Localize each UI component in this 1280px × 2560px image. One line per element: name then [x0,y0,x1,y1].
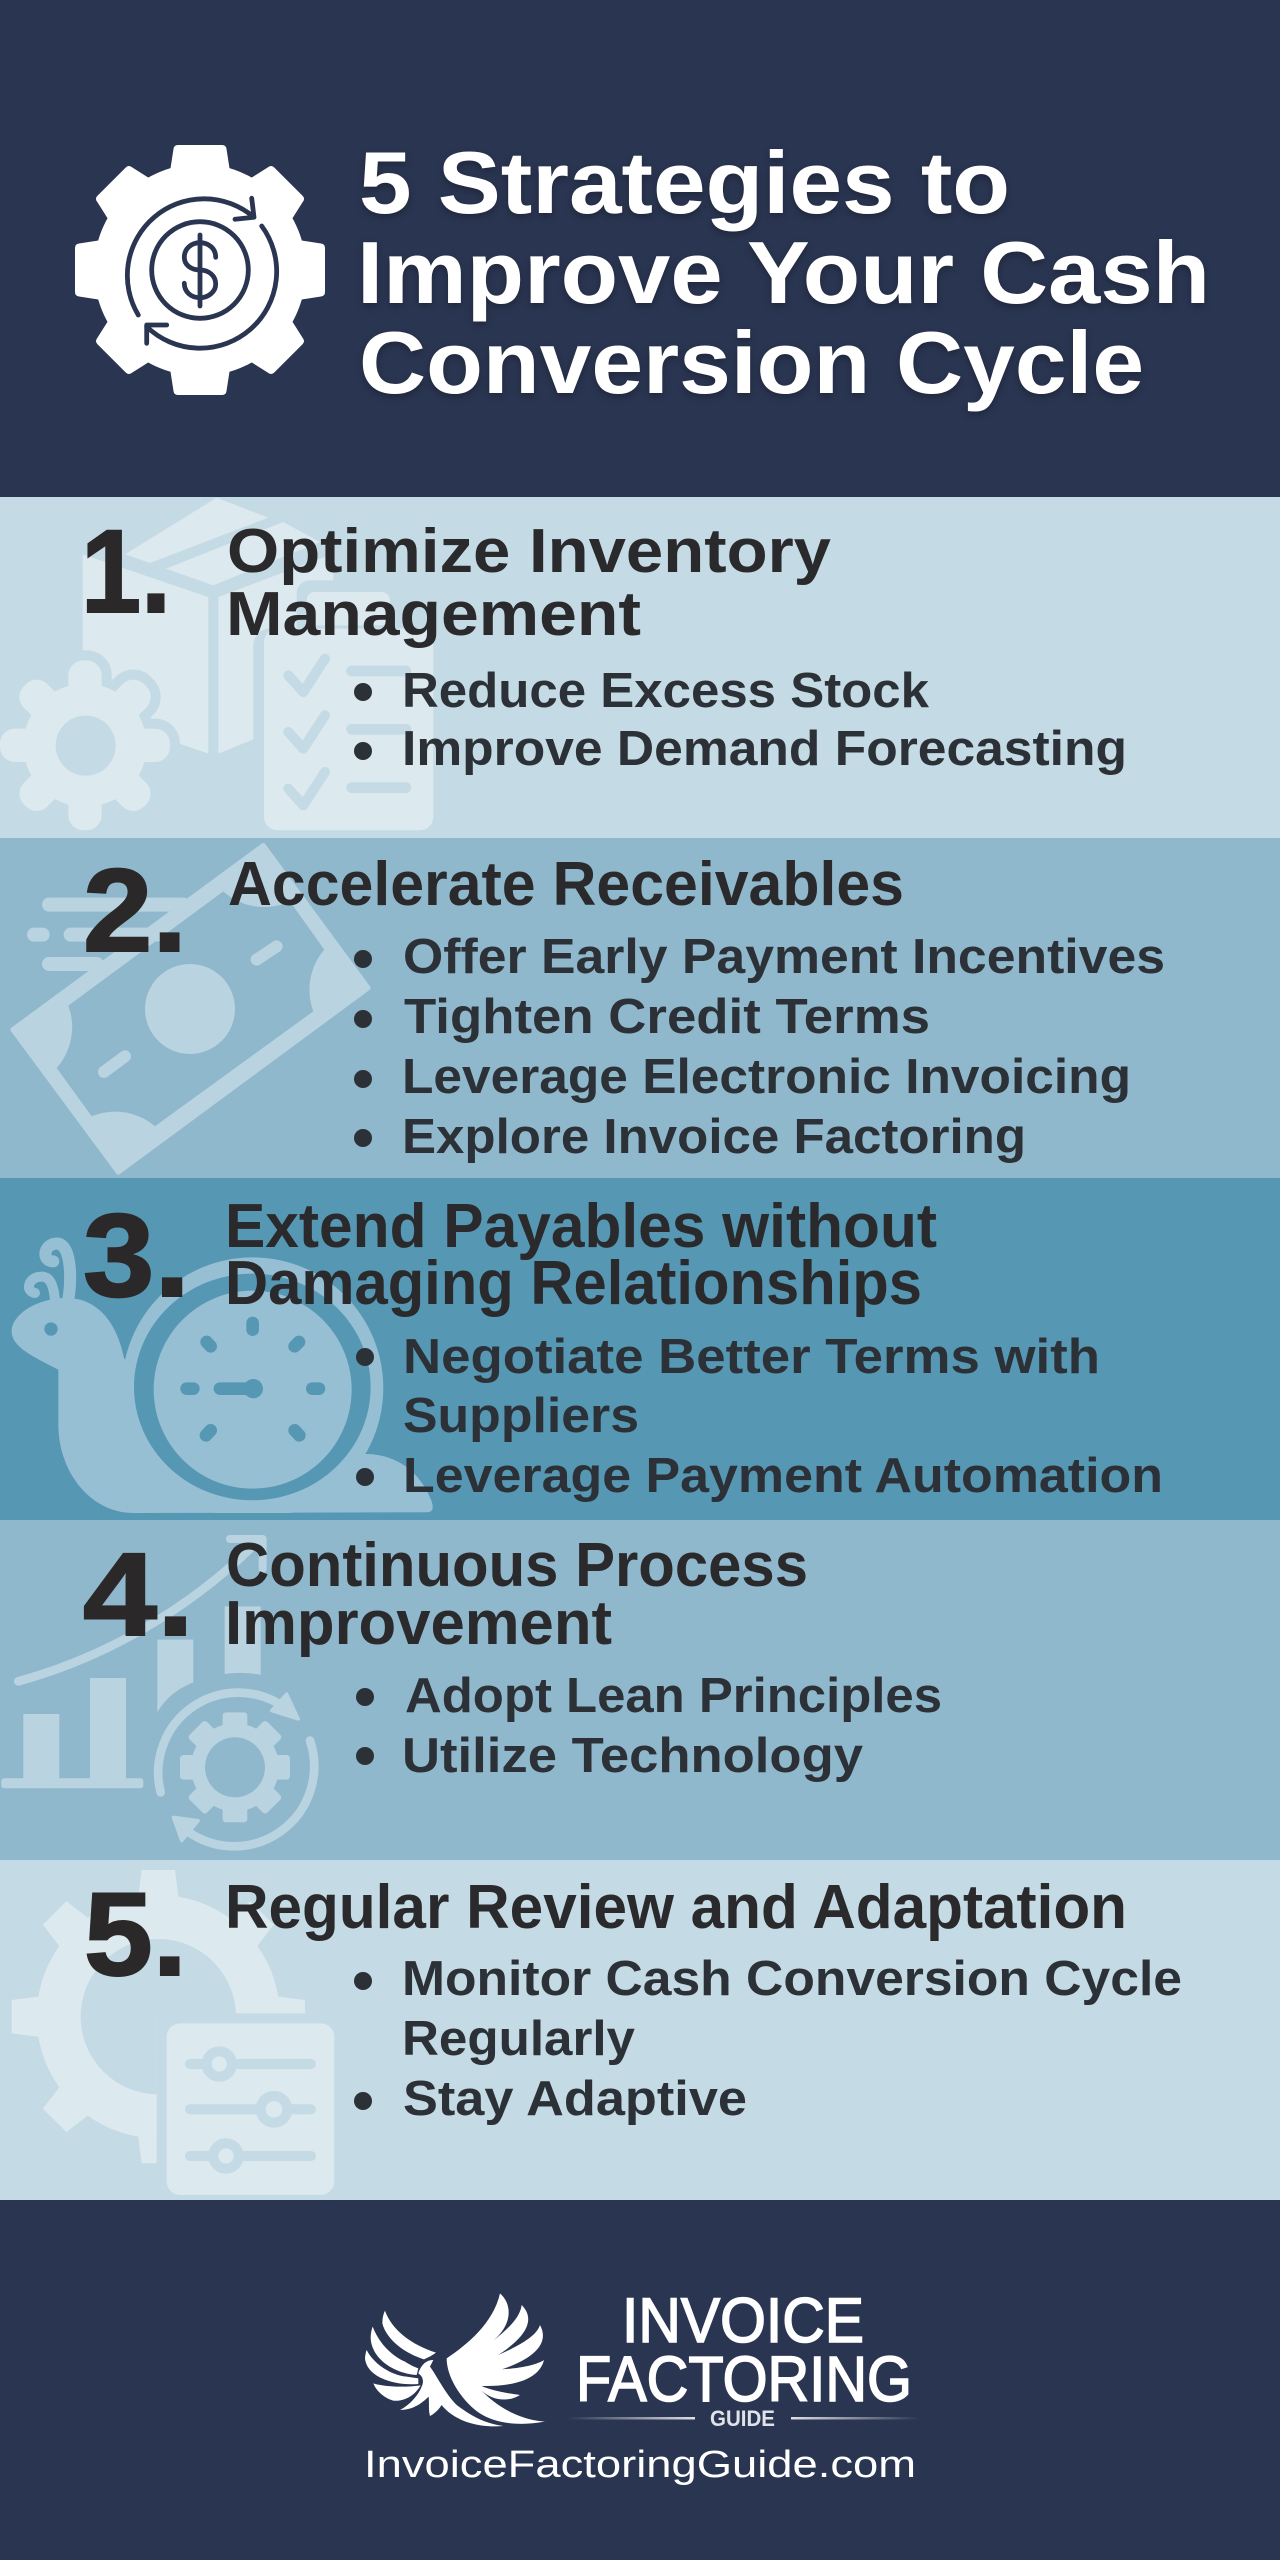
bullet list 4: Utilize Technology [402,1729,863,1783]
bullet list 2: Tighten Credit Terms [404,990,930,1044]
title: Improve Your Cash [357,223,1210,322]
heading 3 [225,1192,937,1318]
bullet list 5: Monitor Cash Conversion Cycle [402,1952,1182,2006]
bullet list 3 [356,1330,1163,1503]
panel: strategy 5 [0,1860,1280,2200]
heading 3: Damaging Relationships [225,1249,922,1318]
bullet list 5: Regularly [402,2012,635,2066]
number 1: 1. [81,506,171,638]
number 3: 3. [83,1190,190,1322]
logo wordmark: INVOICE [622,2286,864,2356]
icon: inventory box, gear and checklist [0,498,443,842]
number 5: 5. [84,1869,187,2001]
bullet list 2: Explore Invoice Factoring [402,1110,1026,1164]
icon: gear with settings sliders [12,1870,334,2195]
logo wordmark: GUIDE [710,2406,775,2431]
title [357,133,1210,412]
bullet list 2: Offer Early Payment Incentives [403,930,1165,984]
title: Conversion Cycle [359,313,1144,412]
heading 1: Management [226,580,641,649]
heading 1 [226,517,832,649]
bullet list 3: Negotiate Better Terms with [403,1330,1100,1384]
logo wordmark [567,2286,920,2431]
heading 2: Accelerate Receivables [228,850,904,919]
icon: flying banknote [13,845,368,1172]
heading 4 [225,1531,808,1658]
number 2: 2. [83,845,187,977]
panel: header [0,0,1280,497]
heading 5: Regular Review and Adaptation [225,1873,1127,1942]
panel: footer [0,2200,1280,2560]
bullet list 2: Leverage Electronic Invoicing [402,1050,1131,1104]
bullet list 2 [354,930,1165,1164]
icon: growth chart and cycling gear [1,1539,314,1846]
panel: strategy 1 [0,497,1280,842]
icon: eagle logo [365,2293,545,2426]
heading 4: Improvement [225,1589,612,1658]
bullet list 3: Suppliers [403,1389,639,1443]
title: 5 Strategies to [359,133,1010,232]
heading 4: Continuous Process [226,1531,808,1600]
icon: gear with dollar and cycle arrows [75,145,325,395]
heading 3: Extend Payables without [225,1192,937,1261]
number 4: 4. [83,1529,194,1661]
bullet list 1: Reduce Excess Stock [402,664,930,718]
bullet list 1 [354,664,1127,776]
bullet list 4 [356,1669,942,1783]
panel: strategy 4 [0,1520,1280,1860]
icon: snail with clock shell [12,1244,433,1519]
panel: strategy 3 [0,1178,1280,1520]
bullet list 1: Improve Demand Forecasting [402,722,1127,776]
bullet list 4: Adopt Lean Principles [405,1669,942,1723]
website url: InvoiceFactoringGuide.com [364,2444,916,2486]
logo wordmark: FACTORING [576,2343,912,2415]
heading 1: Optimize Inventory [227,517,832,586]
bullet list 3: Leverage Payment Automation [403,1449,1163,1503]
panel: strategy 2 [0,838,1280,1178]
bullet list 5: Stay Adaptive [403,2072,747,2126]
bullet list 5 [354,1952,1182,2126]
